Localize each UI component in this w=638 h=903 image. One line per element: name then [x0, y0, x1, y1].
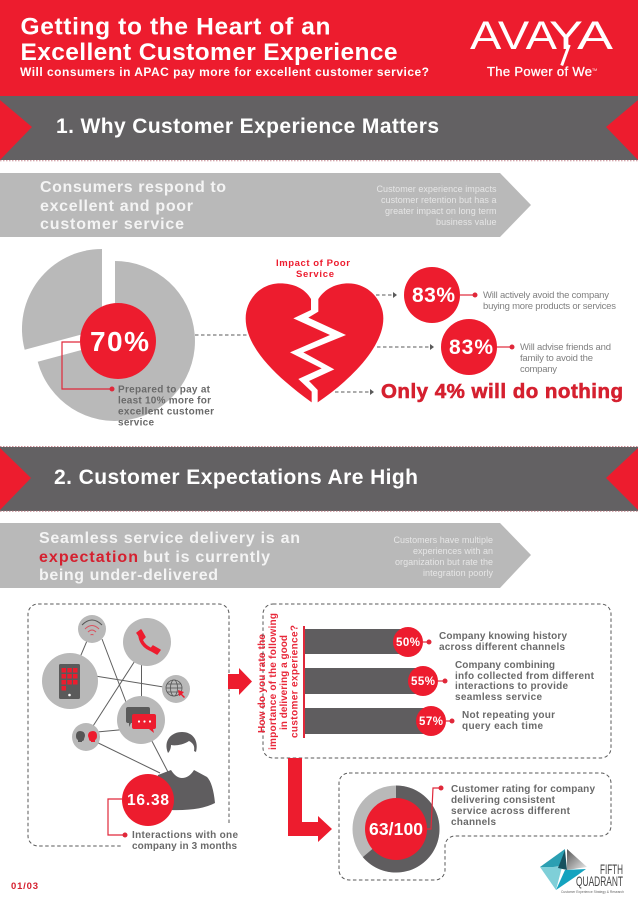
bar: 55%: [305, 666, 448, 696]
icon: globe: [162, 675, 190, 703]
arrow: network to ratings: [228, 668, 252, 695]
arrow heading: [40, 179, 226, 233]
connector: pie to heart: [195, 334, 247, 336]
callout: only 4%: Only 4% will do nothing: [381, 380, 623, 403]
arrow: heart to second stat: [377, 344, 434, 350]
stat text: [483, 290, 616, 312]
page number: 01/03: [11, 881, 38, 892]
logo: Fifth Quadrant: [540, 849, 624, 894]
stat text: family to avoid the: [520, 353, 593, 364]
stat: 83% advise: 83%: [449, 336, 493, 359]
stat text: company: [520, 364, 557, 375]
heading: impact of poor service: [276, 258, 350, 280]
stat text: Will actively avoid the company: [483, 290, 609, 301]
arrow heading: Consumers respond to: [40, 179, 226, 196]
score caption: [451, 784, 595, 828]
bar label: query each time: [462, 721, 543, 732]
bar label: info collected from different: [455, 671, 595, 682]
arrow heading: being under-delivered: [39, 567, 218, 584]
section 1 heading: 1. Why Customer Experience Matters: [56, 115, 439, 138]
pie caption: [118, 384, 214, 428]
logo: Avaya: Y: [549, 14, 583, 58]
logo: Avaya: [470, 14, 613, 79]
arrow note: greater impact on long term: [385, 206, 496, 216]
section 2 heading: 2. Customer Expectations Are High: [54, 466, 418, 489]
arrow note: customer retention but has a: [381, 195, 496, 205]
arrow note: Customer experience impacts: [376, 184, 497, 194]
callout line: [108, 799, 128, 838]
stat: 83% avoid: 83%: [412, 284, 455, 307]
stat: 83% advise: [441, 319, 611, 375]
heading: impact of poor service: Service: [296, 269, 334, 280]
bar label: Company knowing history: [439, 631, 567, 642]
bar label: [439, 631, 567, 653]
panel: consistency score: [339, 773, 611, 880]
icon: speaking heads: [72, 723, 100, 751]
bar label: Not repeating your: [462, 710, 555, 721]
logo: Avaya: TM: [592, 68, 597, 72]
pie callout line: [62, 342, 114, 392]
interactions caption: company in 3 months: [132, 841, 237, 852]
vertical question: importance of the following: [268, 613, 279, 750]
arrow heading: expectation: [39, 549, 138, 566]
panel: interactions network: [28, 604, 238, 852]
interactions caption: Interactions with one: [132, 830, 238, 841]
section band 1: [0, 96, 638, 161]
pie caption: service: [118, 418, 154, 428]
logo: Avaya: AVA: [470, 14, 557, 58]
logo: Avaya: A: [577, 14, 613, 58]
donut chart: [352, 786, 440, 872]
bar: 57%: 57%: [419, 716, 443, 728]
pie chart: 70%: [22, 249, 214, 428]
bar label: seamless service: [455, 692, 542, 703]
score caption: channels: [451, 817, 496, 828]
icon: phone: [123, 618, 171, 666]
title: Getting to the Heart of an: [20, 14, 330, 40]
arrow: heart to first stat: [376, 292, 397, 298]
heading: impact of poor service: Impact of Poor: [276, 258, 350, 269]
callout line: [427, 786, 444, 829]
arrow note: integration poorly: [423, 568, 494, 578]
stat circle: 16.38: [122, 774, 174, 826]
arrow: ratings to score: [288, 758, 332, 842]
score caption: service across different: [451, 806, 571, 817]
arrow heading: excellent and poor: [40, 198, 193, 215]
icon: chat bubbles: [117, 696, 165, 744]
arrow heading: [39, 530, 300, 584]
bar label: [455, 660, 595, 703]
bar: 50%: [305, 627, 432, 657]
title: Excellent Customer Experience: [20, 39, 398, 66]
arrow heading: but is currently: [143, 549, 270, 566]
stat circle: 16.38: 16.38: [127, 792, 169, 809]
vertical question: in delivering a good: [279, 635, 290, 730]
vertical question: How do you rate the: [257, 634, 268, 733]
vertical question: [257, 613, 300, 750]
stat text: buying more products or services: [483, 301, 616, 312]
bar: 57%: [305, 706, 454, 736]
icon: tablet: [42, 653, 98, 709]
donut chart: 63/100: [369, 819, 423, 839]
arrow: heart to nothing line: [335, 389, 374, 395]
arrow heading: Seamless service delivery is an: [39, 530, 300, 547]
arrow note: business value: [436, 217, 496, 227]
icon: wifi: [78, 615, 106, 643]
arrow note: organization but rate the: [395, 557, 493, 567]
arrow heading: customer service: [40, 216, 184, 233]
bar label: Company combining: [455, 660, 555, 671]
stat text: Will advise friends and: [520, 342, 611, 353]
vertical question: customer experience?: [290, 625, 300, 738]
grey arrow panel 1: [0, 173, 531, 237]
logo: Fifth Quadrant: Customer Experience Strategy & Research: [561, 889, 624, 894]
icon: broken heart: [246, 283, 383, 402]
bar label: [462, 710, 555, 732]
arrow note: experiences with an: [413, 546, 493, 556]
subtitle: Will consumers in APAC pay more for excellent customer service?: [20, 65, 429, 79]
pie caption: least 10% more for: [118, 396, 211, 406]
arrow note: [394, 535, 494, 578]
score caption: Customer rating for company: [451, 784, 595, 795]
pie caption: excellent customer: [118, 406, 214, 418]
bar: 50%: 50%: [396, 637, 420, 649]
bar label: across different channels: [439, 642, 565, 653]
arrow note: [376, 184, 497, 227]
pie caption: Prepared to pay at: [118, 384, 211, 396]
section band 2: [0, 446, 638, 511]
axis line: [303, 626, 305, 738]
pie value: 70%: [90, 326, 149, 357]
header banner: [0, 0, 638, 97]
grey arrow panel 2: [0, 523, 531, 588]
bar: 55%: 55%: [411, 676, 435, 688]
panel: importance ratings: [257, 604, 611, 758]
bar label: interactions to provide: [455, 681, 568, 692]
stat text: [520, 342, 611, 375]
network lines: [70, 629, 176, 773]
stat: 83% avoid: [404, 267, 616, 323]
logo: Avaya: The Power of We: [487, 64, 592, 79]
score caption: delivering consistent: [451, 795, 556, 806]
interactions caption: [132, 830, 238, 852]
arrow note: Customers have multiple: [394, 535, 493, 545]
title: [20, 14, 398, 66]
icon: person: [150, 732, 215, 810]
